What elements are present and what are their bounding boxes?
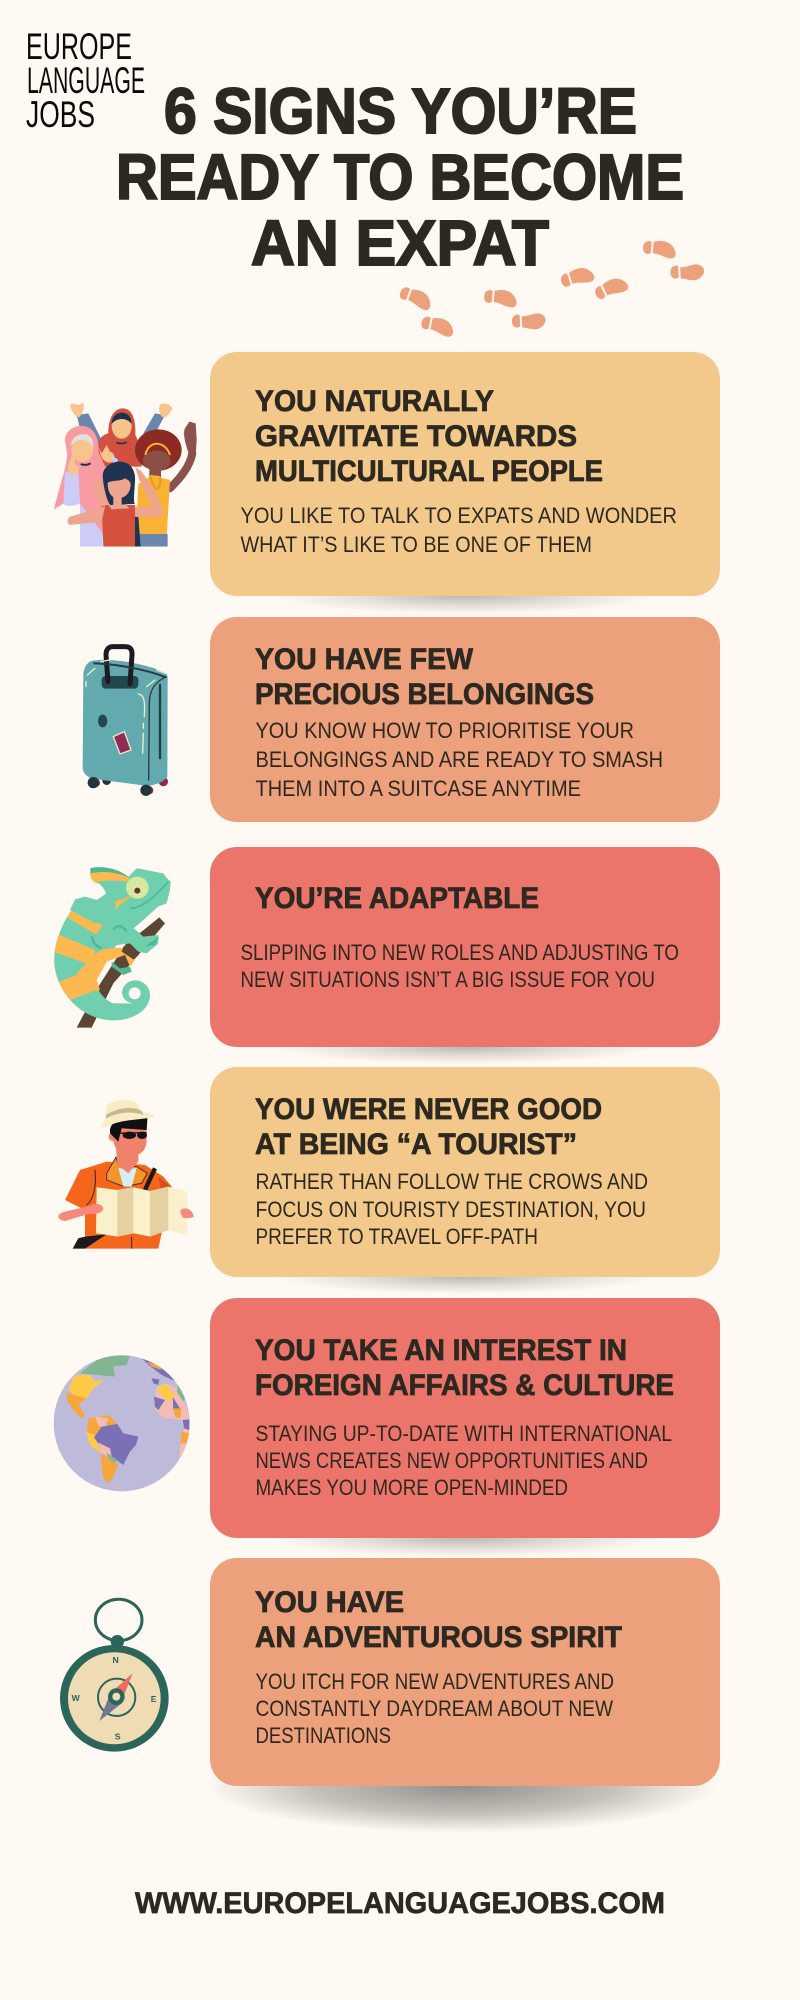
icon: group of multicultural people bbox=[54, 403, 197, 547]
card 6 heading: AN ADVENTUROUS SPIRIT bbox=[255, 1621, 622, 1654]
title: 6 SIGNS YOU’RE bbox=[164, 75, 637, 147]
card 5 body text bbox=[256, 1421, 672, 1500]
card 2 body text: YOU KNOW HOW TO PRIORITISE YOUR bbox=[256, 718, 634, 743]
card 1 body text bbox=[240, 503, 677, 557]
panel: card 6 adventurous spirit bbox=[210, 1558, 720, 1786]
card 4 body text: PREFER TO TRAVEL OFF-PATH bbox=[256, 1224, 538, 1249]
logo: LANGUAGE bbox=[27, 60, 145, 101]
card 5 body text: STAYING UP-TO-DATE WITH INTERNATIONAL bbox=[256, 1421, 672, 1446]
title: AN EXPAT bbox=[251, 207, 549, 279]
card 4 background bbox=[210, 1067, 720, 1277]
logo: JOBS bbox=[26, 94, 95, 135]
icon: compass bbox=[60, 1599, 169, 1752]
card 4 heading bbox=[255, 1093, 602, 1161]
logo bbox=[26, 26, 145, 135]
card 6 body text: CONSTANTLY DAYDREAM ABOUT NEW bbox=[256, 1696, 614, 1721]
card 2 heading: PRECIOUS BELONGINGS bbox=[255, 678, 594, 711]
card 2 body text: THEM INTO A SUITCASE ANYTIME bbox=[256, 776, 581, 801]
card 5 heading: YOU TAKE AN INTEREST IN bbox=[255, 1334, 627, 1367]
card 3 body text bbox=[240, 940, 679, 992]
card 3 body text: NEW SITUATIONS ISN’T A BIG ISSUE FOR YOU bbox=[240, 967, 655, 992]
card 2 background bbox=[210, 617, 720, 822]
card 4 body text: FOCUS ON TOURISTY DESTINATION, YOU bbox=[256, 1197, 646, 1222]
card 4 body text: RATHER THAN FOLLOW THE CROWS AND bbox=[256, 1169, 648, 1194]
card 5 heading bbox=[255, 1334, 674, 1402]
panel: card 5 foreign affairs bbox=[210, 1298, 720, 1538]
icon: globe bbox=[54, 1355, 190, 1491]
title: READY TO BECOME bbox=[116, 141, 684, 213]
card 2 body text bbox=[256, 718, 663, 801]
panel: card 2 few belongings bbox=[210, 617, 720, 822]
card 2 heading bbox=[255, 643, 594, 711]
card 1 heading: YOU NATURALLY bbox=[255, 385, 494, 418]
panel: card 3 adaptable bbox=[210, 847, 720, 1047]
logo: EUROPE bbox=[26, 26, 132, 67]
title bbox=[116, 75, 684, 279]
card 3 body text: SLIPPING INTO NEW ROLES AND ADJUSTING TO bbox=[240, 940, 679, 965]
icon: chameleon bbox=[53, 867, 171, 1028]
card 6 background bbox=[210, 1558, 720, 1786]
card 5 body text: NEWS CREATES NEW OPPORTUNITIES AND bbox=[256, 1448, 648, 1473]
icon: compass: W bbox=[72, 1693, 81, 1703]
icon: footprints bbox=[397, 239, 705, 338]
card 1 background bbox=[210, 352, 720, 596]
card 1 heading: GRAVITATE TOWARDS bbox=[255, 420, 577, 453]
card 6 heading: YOU HAVE bbox=[255, 1586, 404, 1619]
card 5 heading: FOREIGN AFFAIRS & CULTURE bbox=[255, 1369, 674, 1402]
card 6 heading bbox=[255, 1586, 622, 1654]
card 3 heading: YOU’RE ADAPTABLE bbox=[255, 882, 539, 915]
card 2 body text: BELONGINGS AND ARE READY TO SMASH bbox=[256, 747, 663, 772]
card 6 body text: YOU ITCH FOR NEW ADVENTURES AND bbox=[256, 1669, 614, 1694]
website url: WWW.EUROPELANGUAGEJOBS.COM bbox=[135, 1887, 665, 1920]
card 5 background bbox=[210, 1298, 720, 1538]
panel: card 1 multicultural people bbox=[210, 352, 720, 596]
icon: compass: E bbox=[151, 1694, 157, 1704]
card 6 body text: DESTINATIONS bbox=[256, 1723, 391, 1748]
card 3 background bbox=[210, 847, 720, 1047]
card 2 heading: YOU HAVE FEW bbox=[255, 643, 474, 676]
card 1 heading: MULTICULTURAL PEOPLE bbox=[255, 455, 603, 488]
icon: compass: N bbox=[113, 1655, 119, 1665]
card 1 body text: YOU LIKE TO TALK TO EXPATS AND WONDER bbox=[240, 503, 677, 528]
card 1 body text: WHAT IT’S LIKE TO BE ONE OF THEM bbox=[240, 532, 592, 557]
card 4 heading: YOU WERE NEVER GOOD bbox=[255, 1093, 602, 1126]
card 1 heading bbox=[255, 385, 603, 488]
panel: card 4 never a tourist bbox=[210, 1067, 720, 1277]
card 4 body text bbox=[256, 1169, 648, 1249]
card 4 heading: AT BEING “A TOURIST” bbox=[255, 1128, 577, 1161]
card 5 body text: MAKES YOU MORE OPEN-MINDED bbox=[256, 1475, 568, 1500]
icon: tourist with map bbox=[58, 1100, 194, 1249]
icon: compass: S bbox=[115, 1731, 121, 1741]
card 6 body text bbox=[256, 1669, 614, 1748]
icon: suitcase bbox=[83, 647, 168, 796]
